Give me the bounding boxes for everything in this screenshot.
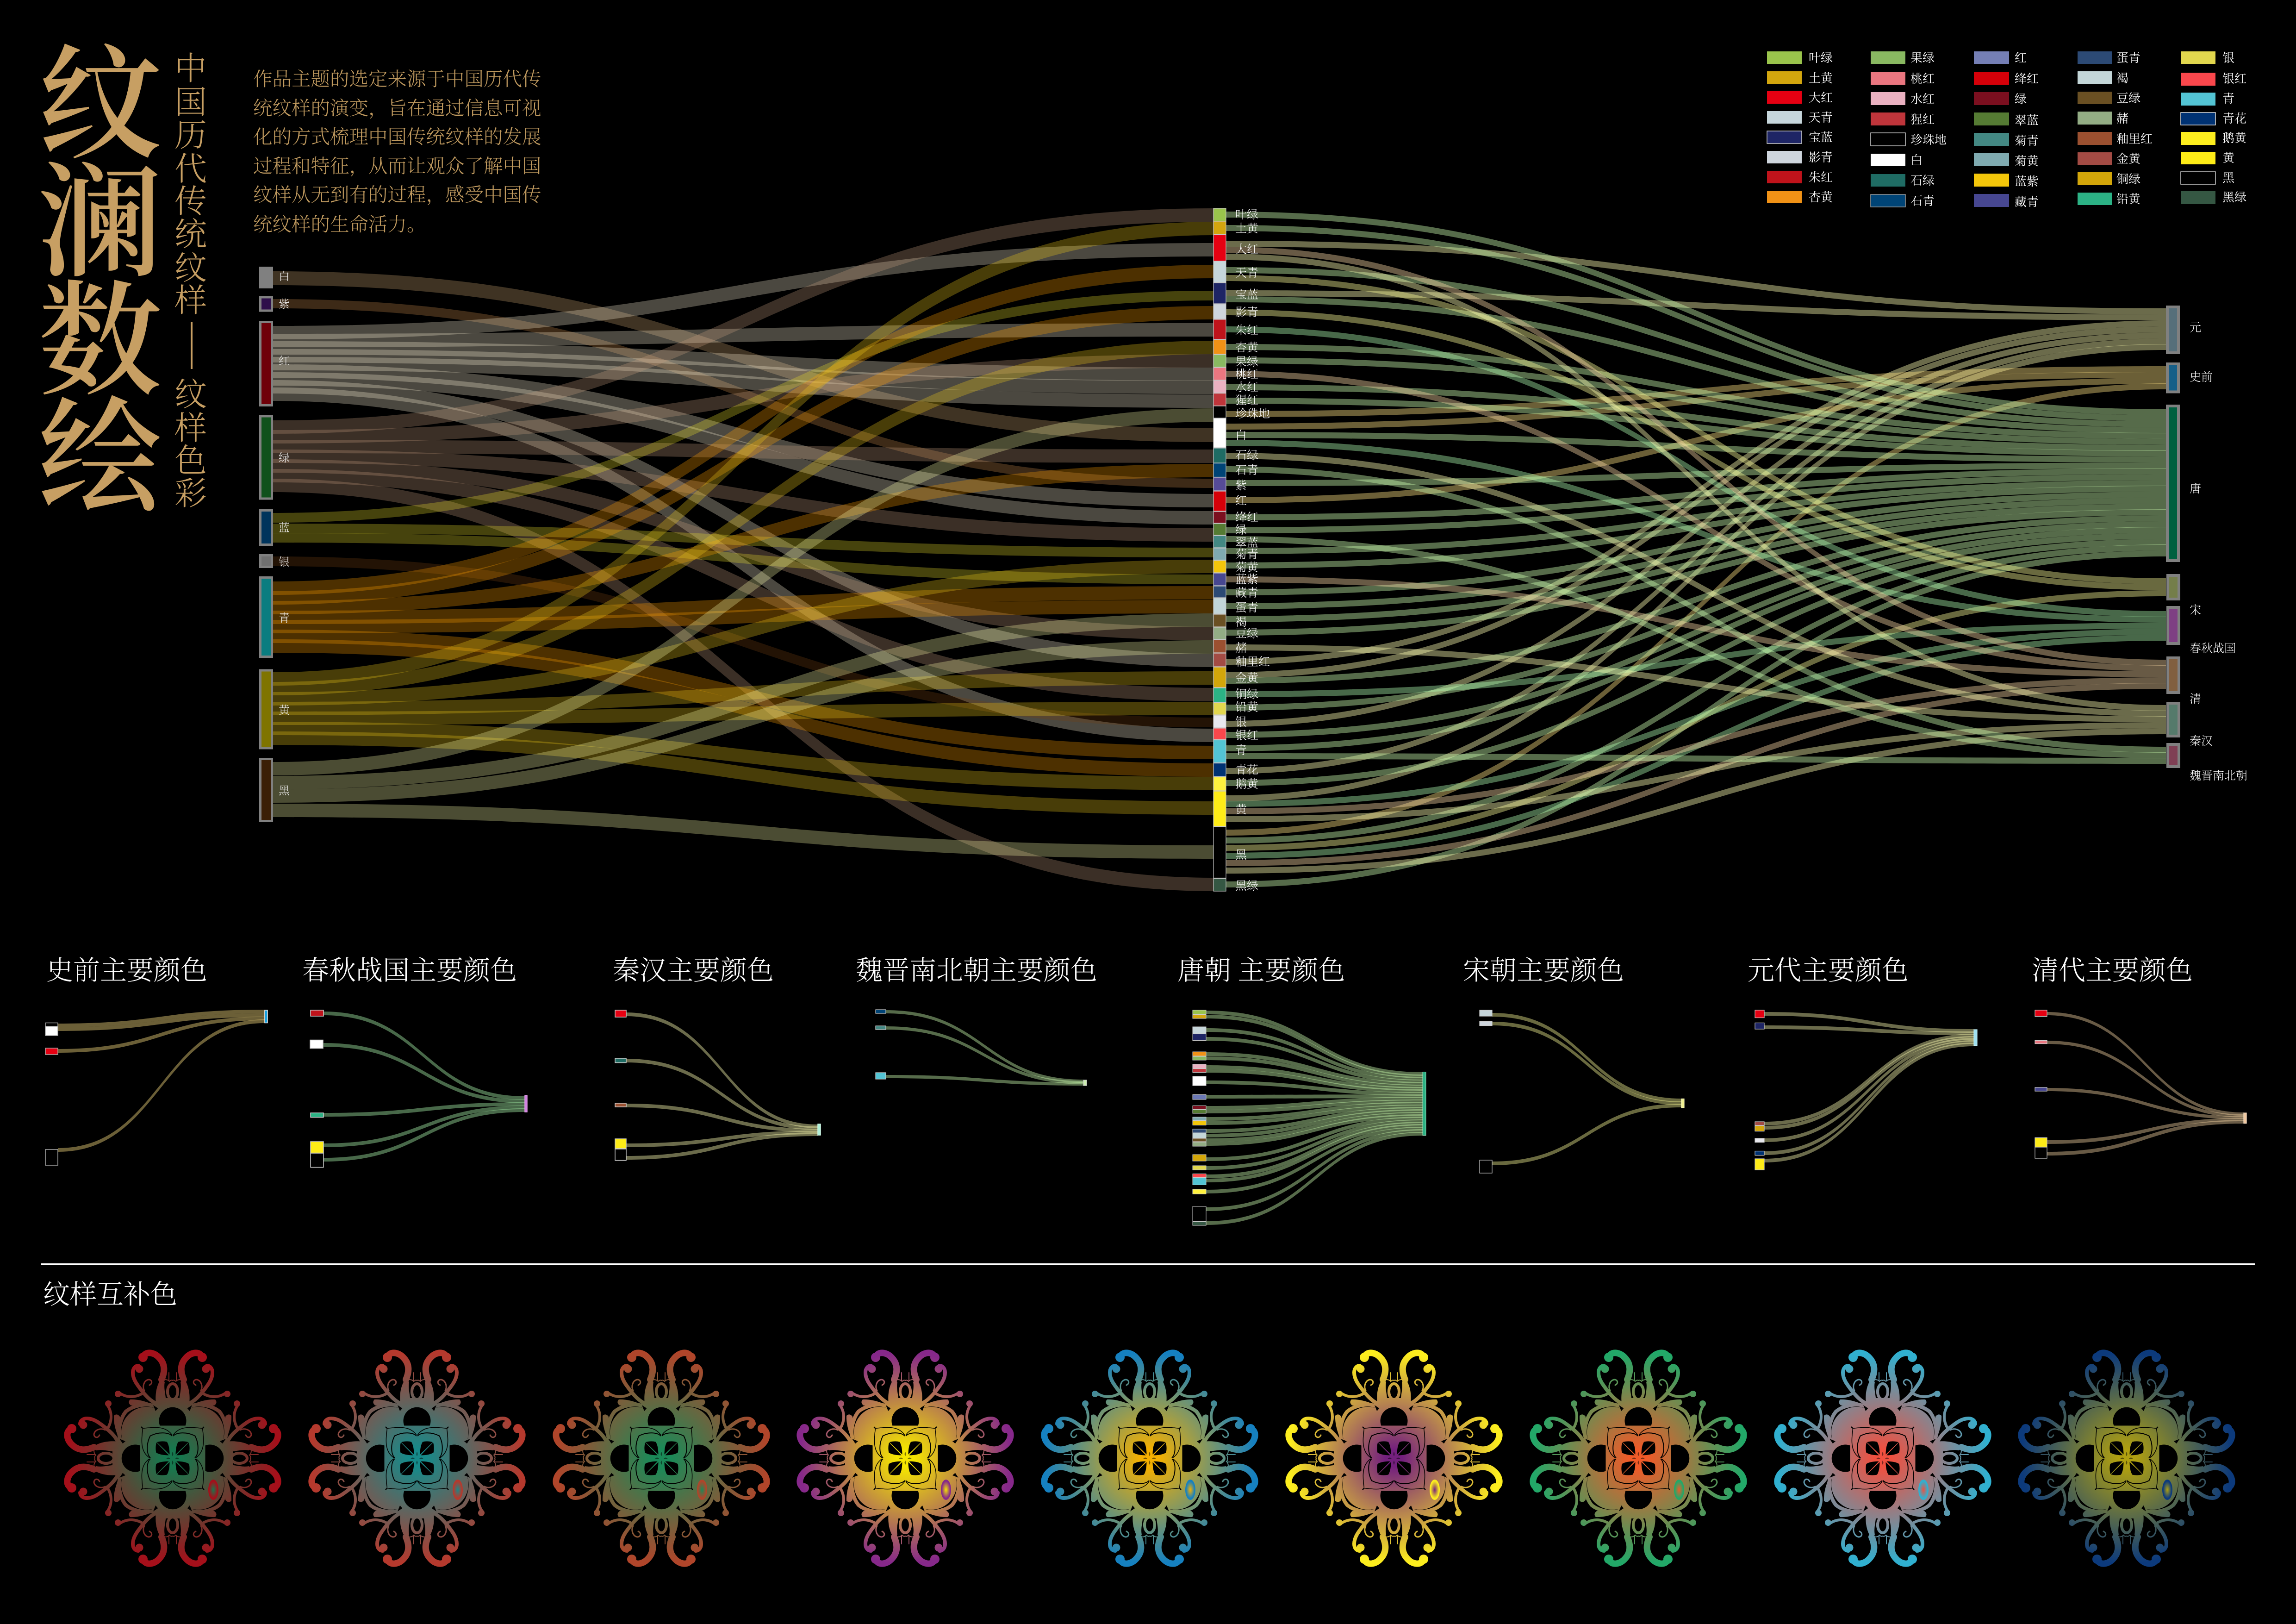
icon: ornament 5 blue orange <box>1044 1353 1255 1564</box>
subtitle: 统 <box>174 217 207 253</box>
legend column 5: 青 <box>2222 92 2234 106</box>
middle colour labels: 白 <box>1235 429 1247 442</box>
chart: 史前 colours <box>45 1010 268 1165</box>
middle colour labels: 青花 <box>1235 763 1258 776</box>
heading: 魏晋南北朝主要颜色: 魏晋南北朝主要颜色 <box>856 956 1097 986</box>
heading: 清代主要颜色: 清代主要颜色 <box>2032 956 2193 986</box>
intro text block: 统纹样的演变，旨在通过信息可视 <box>253 98 541 119</box>
flows from 黑 <box>273 408 1213 859</box>
legend column 4: 铜绿 <box>2116 173 2140 186</box>
legend column 3: 菊青 <box>2015 134 2039 148</box>
legend column 2: 水红 <box>1910 93 1935 106</box>
subtitle: 中 <box>174 51 207 87</box>
legend column 2: 猩红 <box>1910 113 1935 126</box>
right dynasty labels: 唐 <box>2190 482 2201 495</box>
legend column 5 <box>2181 51 2247 204</box>
heading: 宋朝主要颜色: 宋朝主要颜色 <box>1463 956 1624 986</box>
title: 数 <box>38 274 162 411</box>
legend column 1: 大红 <box>1809 91 1833 105</box>
middle colour labels: 银红 <box>1235 729 1258 742</box>
title: 绘 <box>38 390 166 528</box>
left hue labels: 蓝 <box>279 522 290 534</box>
legend column 2: 石绿 <box>1910 174 1935 187</box>
chart: 魏晋南北朝 colours <box>876 1010 1087 1086</box>
title: 纹 <box>38 37 162 175</box>
middle colour labels: 银 <box>1235 716 1247 729</box>
legend column 5: 鹅黄 <box>2222 131 2247 145</box>
chart: main sankey, colour name to dynasty flows <box>1226 212 2166 887</box>
legend column 1: 天青 <box>1809 111 1833 125</box>
flows from 红 <box>273 243 1213 742</box>
legend column 3 <box>1974 51 2039 209</box>
right dynasty labels: 清 <box>2190 693 2201 706</box>
middle colour labels: 天青 <box>1235 267 1258 280</box>
legend column 1: 叶绿 <box>1809 51 1833 65</box>
subtitle: 纹 <box>174 377 207 413</box>
left hue labels: 红 <box>279 355 290 368</box>
legend column 4: 赭 <box>2116 112 2128 125</box>
right dynasty labels: 宋 <box>2190 604 2201 617</box>
chart: 清代 colours <box>2035 1010 2246 1158</box>
legend column 4: 釉里红 <box>2116 132 2153 146</box>
left hue labels: 绿 <box>279 452 290 464</box>
flows from 青 <box>273 265 1213 777</box>
heading: 唐朝 主要颜色: 唐朝 主要颜色 <box>1177 956 1345 986</box>
right dynasty labels: 魏晋南北朝 <box>2190 769 2247 782</box>
middle colour labels: 影青 <box>1235 306 1258 319</box>
legend column 2: 珍珠地 <box>1910 133 1947 147</box>
middle colour labels: 豆绿 <box>1235 627 1258 640</box>
subtitle: 样 <box>174 283 207 319</box>
middle colour labels: 石绿 <box>1235 449 1258 462</box>
legend column 4 <box>2078 51 2153 206</box>
left hue labels <box>279 270 290 797</box>
intro text block <box>253 69 541 235</box>
legend column 1: 朱红 <box>1809 171 1833 184</box>
icon: ornament 1 red green <box>67 1353 278 1564</box>
right dynasty labels: 春秋战国 <box>2190 642 2236 655</box>
flows to 春秋战国 <box>1226 326 2166 859</box>
chart: main sankey, hue to colour name flows <box>273 208 1213 891</box>
intro text block: 化的方式梳理中国传统纹样的发展 <box>253 126 541 148</box>
middle colour labels: 金黄 <box>1235 672 1259 685</box>
legend column 4: 豆绿 <box>2116 92 2140 105</box>
subtitle <box>174 51 207 512</box>
heading: 秦汉主要颜色: 秦汉主要颜色 <box>613 956 774 986</box>
subtitle: 历 <box>174 118 207 154</box>
legend column 2: 果绿 <box>1910 51 1935 65</box>
middle colour labels: 猩红 <box>1235 394 1258 407</box>
middle colour labels: 翠蓝 <box>1235 537 1258 550</box>
middle colour labels: 桃红 <box>1235 368 1258 381</box>
intro text block: 纹样从无到有的过程，感受中国传 <box>253 184 541 206</box>
intro text block: 统纹样的生命活力。 <box>253 214 426 235</box>
left hue labels: 白 <box>279 270 290 283</box>
icon: ornament 8 cyan coral <box>1777 1353 1988 1564</box>
legend column 5: 青花 <box>2222 112 2246 125</box>
middle colour labels: 果绿 <box>1235 356 1258 369</box>
icon: ornament 7 green coral <box>1533 1353 1744 1564</box>
chart: 唐朝 colours <box>1193 1010 1426 1225</box>
legend column 3: 藏青 <box>2015 195 2039 209</box>
flows from 蓝 <box>273 291 1213 584</box>
heading: 史前主要颜色: 史前主要颜色 <box>46 956 207 986</box>
middle colour labels: 黄 <box>1235 803 1247 816</box>
middle colour labels: 蛋青 <box>1235 601 1258 614</box>
middle colour labels: 大红 <box>1235 243 1258 256</box>
intro text block: 过程和特征，从而让观众了解中国 <box>253 156 541 177</box>
legend column 3: 绿 <box>2015 93 2027 106</box>
flows from 银 <box>273 556 1213 727</box>
middle colour labels: 朱红 <box>1235 324 1258 337</box>
middle colour labels: 水红 <box>1235 381 1258 394</box>
flows to 清 <box>1226 247 2166 866</box>
legend column 2 <box>1871 51 1947 208</box>
icon: ornament 2 brick teal <box>311 1353 523 1564</box>
chart: 宋朝 colours <box>1480 1010 1684 1173</box>
legend column 4: 褐 <box>2116 72 2128 85</box>
legend column 1 <box>1767 51 1833 204</box>
icon: ornament 9 navy olive <box>2021 1353 2232 1564</box>
middle colour labels: 叶绿 <box>1235 208 1258 221</box>
middle colour labels: 宝蓝 <box>1235 288 1258 301</box>
legend column 5: 银红 <box>2222 72 2246 86</box>
legend column 3: 红 <box>2015 51 2027 65</box>
legend column 1: 宝蓝 <box>1809 131 1833 144</box>
chart: 春秋战国 colours <box>310 1010 527 1168</box>
left hue labels: 青 <box>279 612 290 625</box>
flows to 宋 <box>1226 275 2166 851</box>
subtitle: 纹 <box>174 251 207 287</box>
right dynasty labels: 元 <box>2190 322 2201 334</box>
legend column 3: 绛红 <box>2015 72 2039 86</box>
flows from 绿 <box>273 208 1213 891</box>
flows from 紫 <box>273 299 1213 488</box>
legend column 5: 黄 <box>2222 151 2235 165</box>
middle colour labels: 珍珠地 <box>1235 407 1270 420</box>
left hue labels: 银 <box>279 556 290 568</box>
legend column 5: 银 <box>2222 51 2234 65</box>
legend column 1: 杏黄 <box>1809 191 1833 204</box>
legend column 4: 金黄 <box>2116 152 2141 166</box>
right dynasty labels: 秦汉 <box>2190 735 2213 748</box>
middle colour labels: 铜绿 <box>1235 688 1258 701</box>
legend column 3: 蓝紫 <box>2015 175 2039 188</box>
middle colour nodes <box>1213 208 1226 891</box>
middle colour labels: 杏黄 <box>1235 341 1259 354</box>
middle colour labels: 绛红 <box>1235 511 1258 524</box>
chart: 元代 colours <box>1755 1010 1977 1170</box>
middle colour labels: 绿 <box>1235 524 1247 537</box>
intro text block: 作品主题的选定来源于中国历代传 <box>253 69 541 90</box>
middle colour labels: 铅黄 <box>1235 701 1259 714</box>
middle colour labels: 赭 <box>1235 642 1247 655</box>
subtitle: 代 <box>174 152 207 187</box>
heading: 春秋战国主要颜色: 春秋战国主要颜色 <box>302 956 517 986</box>
middle colour labels: 蓝紫 <box>1235 573 1258 586</box>
middle colour labels <box>1235 208 1270 893</box>
middle colour labels: 菊青 <box>1235 548 1258 561</box>
middle colour labels: 黑绿 <box>1235 880 1258 893</box>
left hue nodes <box>260 268 272 821</box>
legend column 5: 黑 <box>2222 171 2235 185</box>
left hue labels: 黄 <box>279 704 290 717</box>
middle colour labels: 紫 <box>1235 479 1247 492</box>
title <box>38 37 166 528</box>
middle colour labels: 黑 <box>1235 849 1247 862</box>
right dynasty nodes <box>2167 307 2179 767</box>
icon: ornament 4 purple yellow <box>800 1353 1011 1564</box>
legend column 2: 石青 <box>1910 194 1935 208</box>
flows to 魏晋南北朝 <box>1226 466 2166 764</box>
middle colour labels: 红 <box>1235 494 1247 507</box>
icon: ornament 6 yellow purple <box>1288 1353 1500 1564</box>
legend column 2: 白 <box>1910 154 1923 167</box>
middle colour labels: 藏青 <box>1235 587 1258 600</box>
flows to 唐 <box>1226 212 2166 887</box>
chart: 秦汉 colours <box>615 1010 821 1160</box>
legend column 4: 蛋青 <box>2116 51 2140 65</box>
legend column 4: 铅黄 <box>2116 193 2141 206</box>
legend column 1: 影青 <box>1809 151 1833 164</box>
legend column 5: 黑绿 <box>2222 191 2246 204</box>
legend column 3: 菊黄 <box>2015 155 2039 168</box>
subtitle: 国 <box>174 85 207 121</box>
middle colour labels: 鹅黄 <box>1235 778 1259 791</box>
legend column 1: 土黄 <box>1809 72 1833 85</box>
heading: 元代主要颜色: 元代主要颜色 <box>1748 956 1909 986</box>
heading: 纹样互补色: 纹样互补色 <box>43 1280 177 1310</box>
middle colour labels: 石青 <box>1235 464 1258 477</box>
icon: ornament 3 rust green <box>556 1353 767 1564</box>
right dynasty labels <box>2190 322 2247 782</box>
title: 澜 <box>38 155 162 293</box>
left hue labels: 黑 <box>279 785 290 797</box>
middle colour labels: 青 <box>1235 744 1247 757</box>
legend column 2: 桃红 <box>1910 72 1935 86</box>
subtitle: 色 <box>174 443 207 479</box>
left hue labels: 紫 <box>279 298 290 311</box>
middle colour labels: 褐 <box>1235 616 1247 629</box>
flows from 黄 <box>273 222 1213 815</box>
subtitle: 传 <box>174 184 207 220</box>
right dynasty labels: 史前 <box>2190 371 2213 384</box>
flows to 史前 <box>1226 366 2166 836</box>
flows to 秦汉 <box>1226 254 2166 874</box>
middle colour labels: 菊黄 <box>1235 561 1259 574</box>
flows to 元 <box>1226 241 2166 801</box>
middle colour labels: 釉里红 <box>1235 656 1270 668</box>
legend column 3: 翠蓝 <box>2015 114 2039 127</box>
middle colour labels: 土黄 <box>1235 222 1259 235</box>
subtitle: 样 <box>174 411 207 447</box>
panel: colour legend <box>1767 51 2247 209</box>
flows from 白 <box>273 271 1213 442</box>
subtitle: 彩 <box>174 476 207 512</box>
